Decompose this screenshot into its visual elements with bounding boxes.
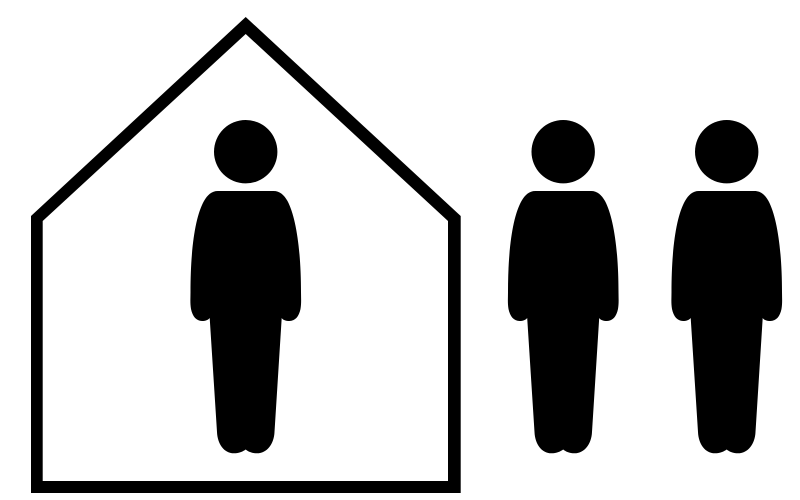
icon: person inside house <box>190 120 301 453</box>
icon: person outside, middle <box>508 120 619 453</box>
icon: house outline <box>31 17 461 493</box>
icon: person outside, right <box>671 120 782 453</box>
